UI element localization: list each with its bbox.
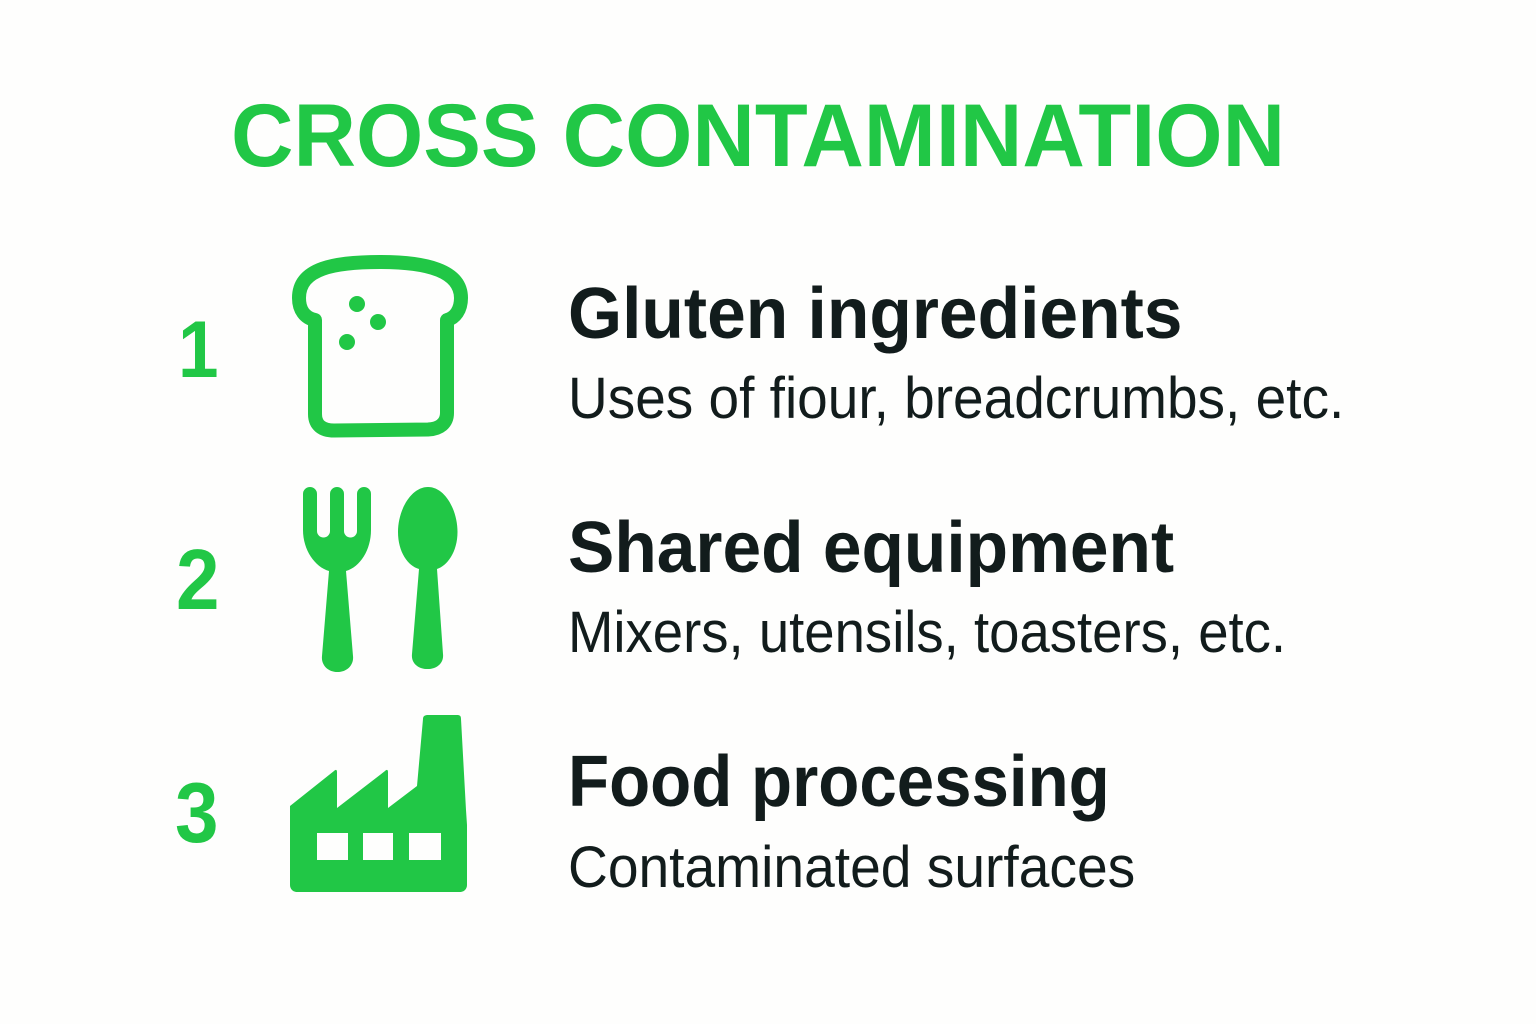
heading: food processing: Food processing <box>568 742 1110 822</box>
number 2: 2 <box>176 533 219 628</box>
description: food processing: Contaminated surfaces <box>568 835 1135 900</box>
number 3: 3 <box>175 766 218 861</box>
icon: factory <box>290 715 467 892</box>
heading: gluten ingredients: Gluten ingredients <box>568 274 1182 354</box>
description: shared equipment: Mixers, utensils, toasters, etc. <box>568 600 1286 665</box>
icon: fork and spoon <box>303 487 458 672</box>
number 1: 1 <box>178 305 219 395</box>
heading: shared equipment: Shared equipment <box>568 508 1174 588</box>
title: CROSS CONTAMINATION <box>231 85 1285 185</box>
description: gluten ingredients: Uses of fiour, breadcrumbs, etc. <box>568 366 1344 431</box>
icon: bread slice <box>292 255 468 438</box>
